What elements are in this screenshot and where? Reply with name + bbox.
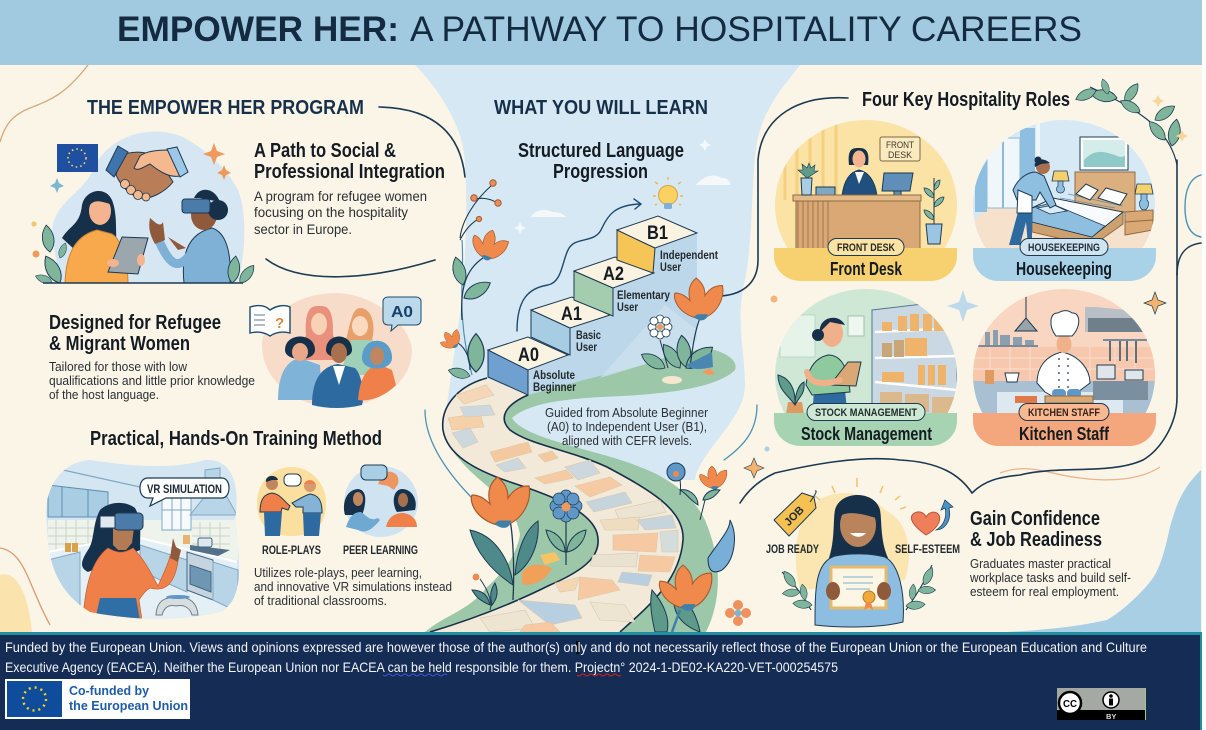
winding stone path and green verge [425, 349, 736, 632]
funding footer [0, 632, 1202, 730]
step: A0 absolute beginner: Beginner [533, 382, 576, 394]
text block: gain confidence and job readiness: & Job Readiness [970, 528, 1102, 551]
step: A1 basic user: Basic [576, 330, 601, 342]
disclaimer text [5, 639, 1147, 676]
speech bubble: VR simulation [140, 478, 229, 506]
panel: what you will learn [437, 97, 764, 632]
arrow: progress curve [517, 199, 641, 331]
logo: co-funded by the European Union: Co-funded by [69, 683, 150, 698]
step: A2 elementary user: User [617, 302, 638, 314]
text block: designed for refugee and migrant women [49, 311, 255, 402]
card: front desk: FRONT [886, 140, 914, 151]
title banner: EMPOWER HER: [117, 10, 399, 49]
illustration: handshake and VR users [32, 131, 258, 286]
step: A1 basic user [531, 297, 610, 355]
card: housekeeping: HOUSEKEEPING [1028, 242, 1100, 254]
step: A1 basic user: User [576, 342, 597, 354]
logo: co-funded by the European Union: the European Union [69, 698, 188, 713]
card: stock management: Stock Management [801, 424, 932, 444]
card: housekeeping [973, 120, 1156, 281]
text block: a path to social and professional integration: Professional Integration [254, 160, 445, 183]
step: B1 independent user: B1 [647, 223, 668, 244]
illustration: group of women: A0 [391, 304, 413, 321]
icon: heart with arrow [911, 500, 953, 535]
card: stock management: STOCK MANAGEMENT [815, 407, 917, 419]
text block: designed for refugee and migrant women: qualifications and little prior knowledge [49, 374, 255, 388]
illustration: VR kitchen simulation [46, 460, 239, 620]
language staircase [488, 216, 718, 395]
text block: training method description: and innovative VR simulations instead [254, 580, 452, 594]
label: self-esteem: SELF-ESTEEM [895, 544, 960, 556]
text block: a path to social and professional integration: A Path to Social & [254, 139, 396, 162]
step: A2 elementary user [574, 257, 671, 316]
text block: a path to social and professional integration: sector in Europe. [254, 221, 352, 237]
icon: job tag [774, 491, 816, 536]
illustration: group of women: ? [275, 315, 284, 332]
text block: a path to social and professional integration: focusing on the hospitality [254, 204, 408, 220]
text block: guided progression: aligned with CEFR levels. [562, 434, 692, 448]
left vine with flowers [437, 180, 511, 381]
branch with leaves [1074, 78, 1188, 165]
title banner [0, 0, 1202, 65]
label: role-plays: ROLE-PLAYS [262, 545, 321, 557]
illustration: group of women [250, 293, 421, 408]
step: A1 basic user: A1 [561, 304, 582, 325]
sparkle accents [764, 290, 1166, 452]
heading: structured language progression: Progression [553, 160, 648, 183]
text block: a path to social and professional integration [254, 139, 445, 237]
text block: training method description [254, 566, 452, 608]
logo: co-funded by the European Union [5, 679, 190, 719]
card: kitchen staff [973, 289, 1163, 446]
text block: gain confidence and job readiness [969, 507, 1131, 599]
heading: the empower her program: THE EMPOWER HER PROGRAM [87, 97, 364, 119]
speech bubble: VR simulation: VR SIMULATION [147, 484, 222, 496]
card: front desk: FRONT DESK [837, 242, 895, 254]
step: A0 absolute beginner [488, 337, 576, 395]
text block: gain confidence and job readiness: esteem for real employment. [970, 585, 1119, 599]
text block: designed for refugee and migrant women: & Migrant Women [49, 332, 190, 355]
disclaimer text: Executive Agency (EACEA). Neither the European Union nor EACEA can be held responsible for them. Projectn° 2024-1-DE02-KA220-VET-000254575 [5, 659, 838, 675]
text block: designed for refugee and migrant women: Designed for Refugee [49, 311, 221, 334]
step: B1 independent user: Independent [660, 250, 718, 262]
card: front desk: Front Desk [830, 259, 903, 279]
step: B1 independent user [617, 216, 718, 274]
step: A0 absolute beginner: Absolute [533, 370, 575, 382]
text block: designed for refugee and migrant women: of the host language. [49, 388, 159, 402]
title banner: A PATHWAY TO HOSPITALITY CAREERS [410, 10, 1082, 49]
label: peer learning: PEER LEARNING [343, 545, 418, 557]
flowers on the hill [639, 278, 723, 384]
card: kitchen staff: Kitchen Staff [1019, 424, 1110, 444]
card: front desk: DESK [888, 150, 913, 161]
heading: practical hands-on training method: Practical, Hands-On Training Method [90, 427, 382, 450]
text block: guided progression: Guided from Absolute Beginner [545, 406, 708, 420]
badge: creative commons BY: CC [1063, 698, 1077, 710]
panel: gain confidence and job readiness [766, 478, 1131, 627]
text block: gain confidence and job readiness: Gain Confidence [970, 507, 1100, 530]
icon: role-plays [257, 467, 326, 536]
card: stock management [774, 289, 957, 446]
heading: four key hospitality roles: Four Key Hospitality Roles [862, 88, 1070, 111]
step: A2 elementary user: A2 [603, 264, 624, 285]
illustration: graduate with certificate [781, 478, 936, 627]
badge: creative commons BY: BY [1106, 712, 1116, 721]
step: A0 absolute beginner: A0 [518, 345, 539, 366]
foreground flowers on the path [470, 458, 764, 632]
text block: gain confidence and job readiness: Graduates master practical [970, 557, 1111, 571]
heading: structured language progression [518, 139, 684, 183]
label: job ready: JOB READY [766, 544, 819, 556]
cursor mark [576, 641, 579, 654]
card: front desk [774, 120, 957, 281]
text block: designed for refugee and migrant women: Tailored for those with low [49, 360, 188, 374]
heading: structured language progression: Structured Language [518, 139, 684, 162]
text block: guided progression: (A0) to Independent User (B1), [547, 420, 707, 434]
panel: the empower her program [32, 97, 452, 620]
text block: training method description: Utilizes role-plays, peer learning, [254, 566, 422, 580]
decorative connecting lines [266, 98, 1201, 503]
card: kitchen staff: KITCHEN STAFF [1028, 407, 1100, 419]
text block: guided progression [545, 406, 708, 448]
decorative clouds and sparkles [514, 139, 731, 234]
badge: creative commons BY [1057, 688, 1146, 721]
icon: peer learning [344, 465, 418, 537]
icon: light bulb [653, 177, 683, 209]
step: B1 independent user: User [660, 262, 681, 274]
panel: four key hospitality roles [764, 78, 1188, 451]
heading: what you will learn: WHAT YOU WILL LEARN [494, 97, 708, 119]
text block: training method description: of traditional classrooms. [254, 594, 387, 608]
text block: gain confidence and job readiness: workplace tasks and build self- [969, 571, 1131, 585]
icon: job tag: JOB [782, 504, 807, 529]
text block: a path to social and professional integration: A program for refugee women [254, 188, 427, 204]
card: housekeeping: Housekeeping [1016, 259, 1112, 279]
step: A2 elementary user: Elementary [617, 290, 671, 302]
